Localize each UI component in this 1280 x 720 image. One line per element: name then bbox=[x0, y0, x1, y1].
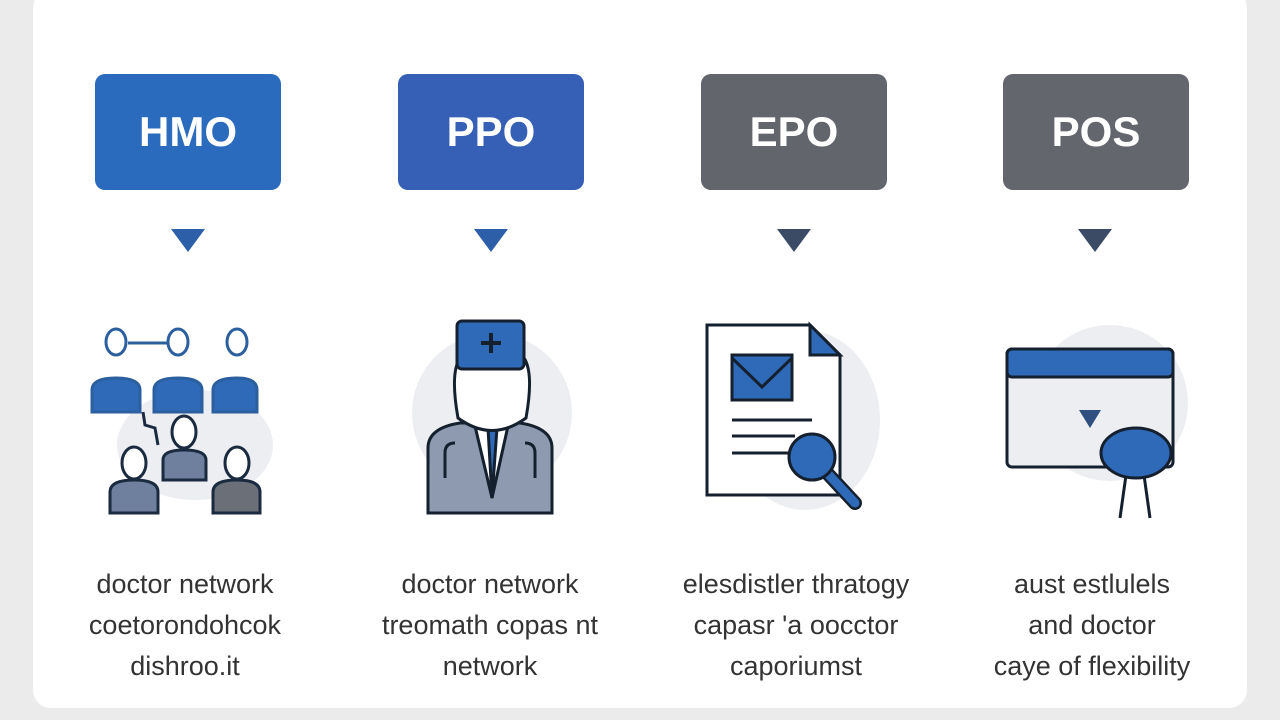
text: PPO: doctor network bbox=[401, 569, 579, 599]
text: PPO: treomath copas nt bbox=[382, 610, 598, 640]
box: POS bbox=[1003, 74, 1189, 190]
arrow: POS bbox=[1078, 229, 1112, 252]
icon: people network bbox=[90, 328, 273, 514]
icon: doctor bbox=[412, 320, 572, 514]
text: HMO: coetorondohcok bbox=[89, 610, 281, 640]
text: POS: caye of flexibility bbox=[994, 651, 1190, 681]
icon: browser window with pointer bbox=[1006, 325, 1188, 518]
text: POS: aust estlulels bbox=[1014, 569, 1170, 599]
text: EPO: elesdistler thratogy bbox=[683, 569, 909, 599]
text: PPO: network bbox=[443, 651, 537, 681]
box: POS: POS bbox=[1052, 108, 1140, 155]
box: EPO: EPO bbox=[750, 108, 838, 155]
text: HMO bbox=[89, 569, 281, 681]
box: EPO bbox=[701, 74, 887, 190]
box: HMO bbox=[95, 74, 281, 190]
text: EPO: caporiumst bbox=[730, 651, 862, 681]
text: HMO: doctor network bbox=[96, 569, 274, 599]
box: PPO bbox=[398, 74, 584, 190]
box: PPO: PPO bbox=[447, 108, 535, 155]
text: POS bbox=[994, 569, 1190, 681]
text: EPO: capasr 'a oocctor bbox=[694, 610, 898, 640]
text: PPO bbox=[382, 569, 598, 681]
arrow: PPO bbox=[474, 229, 508, 252]
arrow: HMO bbox=[171, 229, 205, 252]
text: POS: and doctor bbox=[1028, 610, 1156, 640]
arrow: EPO bbox=[777, 229, 811, 252]
icon: document with magnifier bbox=[706, 322, 880, 510]
text: HMO: dishroo.it bbox=[130, 651, 240, 681]
text: EPO bbox=[683, 569, 910, 681]
box: HMO: HMO bbox=[139, 108, 237, 155]
